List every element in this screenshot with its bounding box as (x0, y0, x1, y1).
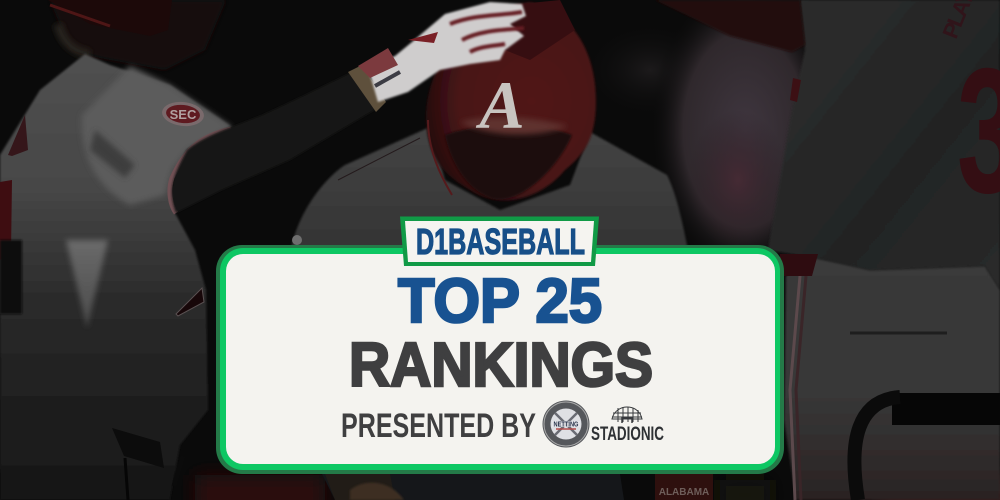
dark red ground glow (195, 475, 1000, 500)
helmet A logo: A (475, 67, 525, 143)
Alabama patch: ALABAMA (659, 487, 709, 498)
left player: jersey (0, 54, 232, 500)
icon: stadium (612, 407, 642, 423)
center player: jersey (292, 127, 688, 250)
SEC patch (161, 100, 205, 128)
right player: red sleeve (655, 0, 805, 52)
logo wordmark: D1BASEBALL (416, 221, 585, 262)
left player: arm sleeve (172, 72, 378, 213)
heading: Top 25: TOP 25 (398, 267, 602, 336)
sponsor wordmark: STADIONIC (591, 424, 664, 445)
logo banner: D1Baseball (400, 216, 599, 266)
right player: pants (780, 254, 1000, 500)
belt (112, 428, 164, 468)
logo: Stadionic (591, 407, 664, 445)
Alabama patch (655, 474, 713, 500)
dugout rail (854, 397, 1000, 500)
left player: head and helmet (48, 0, 226, 70)
sleeve trim (170, 129, 231, 213)
batting glove on helmet (358, 2, 526, 102)
blurred stadium glow (580, 0, 840, 280)
right player: torso (768, 0, 1000, 290)
text: presented by: PRESENTED BY (341, 407, 536, 445)
center player: batting helmet (426, 0, 596, 200)
heading: Rankings: RANKINGS (349, 331, 653, 400)
bottom player remnant (322, 474, 624, 500)
icon: netting sponsor badge: NETTING (554, 422, 579, 428)
panel: rankings card (216, 245, 784, 474)
wrist tape (348, 65, 386, 112)
icon: netting sponsor badge (542, 400, 590, 448)
SEC patch: SEC (170, 107, 197, 122)
